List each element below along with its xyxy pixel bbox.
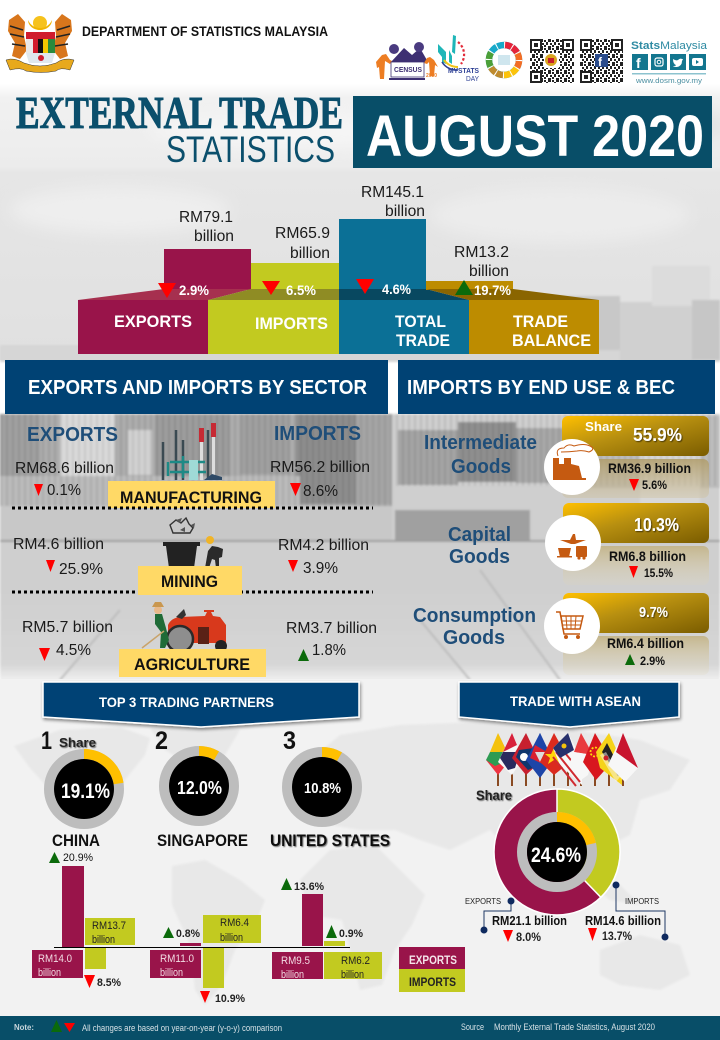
sector row: manufacturing: RM56.2 billion [270, 459, 370, 476]
row: intermediate goods: Share [585, 419, 622, 434]
sector row: agriculture: AGRICULTURE [134, 655, 250, 674]
QR code: facebook [580, 39, 623, 83]
row: capital goods: Capital [448, 524, 511, 546]
title: external trade statistics: STATISTICS [166, 129, 335, 170]
callout: ASEAN exports: EXPORTS [465, 897, 501, 906]
logo: StatsMalaysia social block: www.dosm.gov.my [635, 78, 703, 85]
bars: United States [272, 878, 382, 981]
donut: United States share: 10.8% [304, 780, 341, 797]
bar: trade balance [426, 244, 599, 354]
row: consumption goods [413, 593, 709, 675]
footer: note and source: All changes are based on year-on-year (y-o-y) comparison [82, 1023, 282, 1033]
bars: Singapore: RM11.0 [160, 953, 194, 965]
header: coat of arms [6, 14, 74, 72]
donut: United States share [270, 727, 390, 850]
panel: top 3 trading partners [32, 682, 465, 1005]
sector row: agriculture [22, 619, 377, 677]
banner: trade with ASEAN [459, 682, 679, 727]
column headings: IMPORTS [274, 423, 361, 445]
bar: trade balance: TRADE [513, 312, 568, 331]
donut: China share: CHINA [52, 831, 100, 850]
banner: trade with ASEAN: TRADE WITH ASEAN [510, 693, 641, 709]
bar: trade balance: 19.7% [474, 282, 512, 298]
row: intermediate goods: Goods [451, 456, 511, 478]
bars: China: 8.5% [97, 977, 121, 989]
row: consumption goods: RM6.4 billion [607, 635, 684, 651]
legend [399, 947, 465, 992]
sector row: manufacturing [15, 459, 370, 508]
title: external trade statistics [16, 88, 343, 170]
column headings: EXPORTS [27, 424, 118, 446]
sector row: agriculture: 4.5% [56, 642, 91, 659]
bar: trade balance: billion [469, 263, 509, 280]
bar: imports [208, 225, 339, 354]
bars: Singapore: 0.8% [176, 928, 200, 940]
row: intermediate goods: RM36.9 billion [608, 460, 691, 476]
row: capital goods: 15.5% [644, 566, 673, 580]
logo: sustainable development goals wheel [489, 45, 519, 75]
logo: mystats day: MYSTATS [448, 68, 479, 75]
sector row: mining: 3.9% [303, 560, 338, 577]
legend: IMPORTS [409, 975, 456, 989]
bars: China [32, 852, 135, 989]
header: department name: DEPARTMENT OF STATISTICS MALAYSIA [82, 23, 328, 39]
bars: United States: RM9.5 [281, 955, 310, 967]
callout: ASEAN exports [465, 897, 567, 944]
footer: note and source [0, 1016, 720, 1040]
sector row: mining: RM4.2 billion [278, 537, 369, 554]
heading: sector: EXPORTS AND IMPORTS BY SECTOR [28, 377, 368, 399]
panel: trade with ASEAN [459, 682, 679, 944]
bar: imports: billion [290, 245, 330, 262]
callout: ASEAN imports [585, 882, 668, 943]
bar: exports: RM79.1 [179, 209, 233, 226]
bar: exports [78, 209, 251, 354]
sector row: manufacturing: 8.6% [303, 483, 338, 500]
logo: StatsMalaysia social block: StatsMalaysia [631, 40, 708, 52]
sector row: mining: MINING [161, 572, 218, 591]
row: consumption goods: Consumption [413, 605, 536, 627]
row: intermediate goods: Intermediate [424, 432, 537, 454]
panel: exports and imports by sector [5, 360, 388, 677]
QR code: facebook: f [598, 55, 603, 69]
sector row: manufacturing: 0.1% [47, 482, 81, 499]
sector row: manufacturing: MANUFACTURING [120, 488, 262, 507]
icon: factory plant [163, 423, 222, 480]
icon: plane ship truck [545, 515, 601, 571]
bar: total trade: TRADE [396, 331, 450, 350]
bar: total trade: RM145.1 [361, 184, 424, 201]
row: capital goods: Goods [449, 546, 510, 568]
bars: Singapore: billion [220, 932, 243, 944]
sector row: manufacturing: RM68.6 billion [15, 460, 114, 477]
donut: ASEAN share of exports and imports [476, 787, 620, 915]
row: intermediate goods: 5.6% [642, 478, 667, 492]
donut: United States share: 3 [283, 727, 296, 755]
bars: Singapore [150, 915, 261, 1005]
legend: EXPORTS [409, 953, 457, 967]
bar: imports: IMPORTS [255, 314, 328, 333]
bar: total trade: billion [385, 203, 425, 220]
bars: United States: 13.6% [294, 881, 324, 893]
logo: mystats day [438, 35, 479, 83]
callout: ASEAN exports: 8.0% [516, 930, 541, 944]
panel: imports by end use and BEC [398, 360, 715, 675]
chart: trade summary stepped bars [78, 184, 599, 354]
row: consumption goods: Goods [443, 627, 505, 649]
callout: ASEAN exports: RM21.1 billion [492, 913, 567, 928]
heading: sector [5, 360, 388, 414]
bars: United States: billion [341, 969, 364, 981]
donut: China share: 1 [41, 727, 52, 755]
donut: China share: Share [59, 735, 96, 750]
bars: United States: 0.9% [339, 928, 363, 940]
sector row: agriculture: RM3.7 billion [286, 620, 377, 637]
icon: factory [544, 439, 600, 495]
bar: exports: billion [194, 228, 234, 245]
heading: end use [398, 360, 715, 414]
logo: census 2020 [376, 42, 438, 80]
bar: total trade [339, 184, 469, 354]
row: intermediate goods: 55.9% [633, 425, 682, 445]
sector row: mining: 25.9% [59, 561, 103, 578]
donut: Singapore share: SINGAPORE [157, 831, 248, 850]
bars: China: RM13.7 [92, 920, 126, 932]
sector row: agriculture: RM5.7 billion [22, 619, 113, 636]
column headings [27, 423, 361, 446]
logo: StatsMalaysia social block: f [636, 55, 641, 71]
QR code: website [530, 39, 574, 83]
bars: United States: billion [281, 969, 304, 981]
bars: China: billion [38, 967, 61, 979]
logo: mystats day: DAY [466, 76, 479, 83]
bar: trade balance: BALANCE [512, 331, 591, 350]
bars: Singapore: 10.9% [215, 993, 245, 1005]
bars: China: RM14.0 [38, 953, 72, 965]
callout: ASEAN imports: 13.7% [602, 929, 632, 943]
logo: StatsMalaysia social block [631, 40, 708, 85]
bar: trade balance: RM13.2 [454, 244, 509, 261]
donut: ASEAN share of exports and imports: 24.6% [531, 844, 581, 867]
row: capital goods [448, 503, 709, 585]
sector row: mining [13, 536, 369, 595]
bars: Singapore: billion [160, 967, 183, 979]
donut: Singapore share: 12.0% [177, 778, 222, 798]
donut: Singapore share [155, 727, 248, 850]
bar: exports: EXPORTS [114, 312, 192, 331]
donut: United States share: UNITED STATES [270, 831, 390, 850]
banner: top 3 trading partners [43, 682, 359, 727]
chart: partner exports and imports [32, 852, 465, 1005]
donut: Singapore share: 2 [155, 727, 168, 755]
bar: imports: RM65.9 [275, 225, 330, 242]
footer: note and source: Monthly External Trade Statistics, August 2020 [494, 1022, 655, 1032]
row: capital goods: RM6.8 billion [609, 548, 686, 564]
donut: ASEAN share of exports and imports: Share [476, 787, 512, 803]
row: consumption goods: 2.9% [640, 654, 665, 668]
bar: imports: 6.5% [286, 282, 317, 298]
footer: note and source: Source [461, 1022, 484, 1032]
row: consumption goods: 9.7% [639, 604, 668, 621]
bars: Singapore: RM6.4 [220, 917, 249, 929]
bar: total trade: 4.6% [382, 281, 411, 297]
bar: exports: 2.9% [179, 282, 210, 298]
icon: mining cart and worker [163, 518, 223, 568]
bar: total trade: TOTAL [395, 312, 446, 331]
bars: China: billion [92, 934, 115, 946]
donut: China share: 19.1% [61, 780, 110, 803]
donut: China share [41, 727, 119, 850]
row: capital goods: 10.3% [634, 515, 679, 535]
row: intermediate goods [424, 416, 709, 498]
world map backdrop [0, 679, 720, 1019]
sector row: mining: RM4.6 billion [13, 536, 104, 553]
callout: ASEAN imports: IMPORTS [625, 897, 659, 906]
bars: China: 20.9% [63, 852, 93, 864]
icon: farmer and tractor [142, 602, 227, 652]
footer: note and source: Note: [14, 1023, 34, 1032]
bars: United States: RM6.2 [341, 955, 370, 967]
sector row: agriculture: 1.8% [312, 642, 346, 659]
logo: census 2020: CENSUS [394, 67, 422, 74]
icon: shopping cart [544, 598, 600, 654]
callout: ASEAN imports: RM14.6 billion [585, 913, 661, 928]
heading: end use: IMPORTS BY END USE & BEC [407, 377, 675, 399]
title: external trade statistics: EXTERNAL TRADE [16, 88, 343, 138]
banner: top 3 trading partners: TOP 3 TRADING PARTNERS [99, 694, 274, 710]
icon: ASEAN flags [486, 733, 638, 786]
logo: census 2020: 2020 [426, 73, 437, 79]
